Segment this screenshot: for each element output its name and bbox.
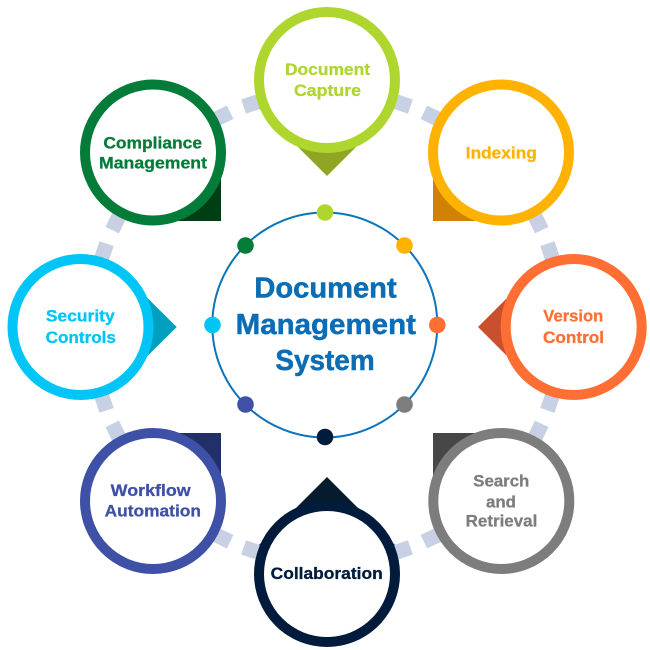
node: Compliance Management: Management — [99, 153, 207, 172]
hub ring — [212, 212, 437, 438]
node: Security Controls — [12, 259, 177, 395]
node: Document Capture — [259, 12, 395, 176]
central hub — [204, 204, 446, 445]
node: Document Capture: Document — [285, 60, 370, 79]
node: Compliance Management: Compliance — [103, 133, 202, 152]
node: Security Controls: Security — [46, 307, 115, 326]
title: Document Management System — [236, 272, 416, 377]
node: Search and Retrieval — [433, 433, 569, 569]
title: Document Management System: System — [275, 345, 375, 377]
node: Version Control: Version — [543, 307, 603, 326]
node: Search and Retrieval: Search — [473, 472, 529, 491]
node: Document Capture: Capture — [294, 81, 361, 100]
node: Search and Retrieval: Retrieval — [466, 512, 537, 531]
node: Security Controls: Controls — [46, 328, 116, 347]
node: Workflow Automation — [85, 433, 221, 569]
dashed outer connector ring — [95, 95, 559, 559]
node: Compliance Management — [85, 84, 221, 221]
node: Collaboration: Collaboration — [271, 564, 383, 583]
node: Workflow Automation: Automation — [105, 502, 201, 521]
node: Collaboration — [259, 477, 395, 642]
title: Document Management System: Document — [254, 272, 397, 304]
node: Workflow Automation: Workflow — [111, 481, 192, 500]
node: Version Control: Control — [543, 328, 604, 347]
hub dots — [204, 204, 446, 445]
node: Search and Retrieval: and — [486, 492, 516, 511]
node: Indexing — [433, 84, 569, 221]
node: Version Control — [478, 259, 642, 395]
title: Document Management System: Management — [236, 309, 416, 341]
node: Indexing: Indexing — [466, 143, 537, 162]
